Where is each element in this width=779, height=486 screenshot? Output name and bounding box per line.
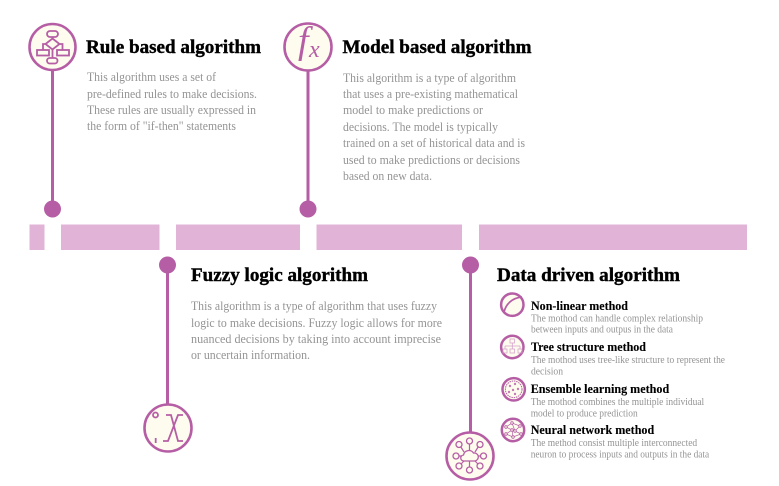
icon: fuzzy logic curve	[144, 404, 192, 452]
text: model based description: based on new data.	[343, 168, 432, 183]
method: neural network	[502, 419, 710, 460]
label: neural network: The method consist multiple interconnected	[531, 438, 697, 449]
panel: model based algorithm	[284, 20, 532, 218]
label: non-linear: between inputs and outpus in the data	[531, 324, 673, 336]
label: ensemble learning	[531, 381, 704, 420]
connector: fuzzy logic	[159, 256, 176, 405]
method: non-linear	[501, 294, 703, 336]
label: ensemble learning: model to produce prediction	[531, 408, 638, 420]
icon: function fx: f	[298, 20, 313, 62]
icon: ensemble	[502, 378, 525, 400]
label: tree structure: decision	[531, 366, 563, 378]
method: tree structure	[501, 336, 725, 378]
label: neural network: Neural network method	[531, 422, 655, 437]
icon: flowchart	[30, 24, 76, 70]
text: model based description	[343, 70, 525, 183]
label: non-linear: Non-linear method	[531, 298, 629, 313]
text: rule based description: These rules are usually expressed in	[87, 102, 256, 117]
text: model based description: decisions. The model is typically	[343, 119, 498, 134]
icon: curve	[501, 294, 524, 316]
timeline bar	[30, 224, 747, 250]
label: tree structure: Tree structure method	[531, 339, 647, 354]
method: ensemble learning	[502, 378, 704, 420]
label: ensemble learning: Ensemble learning method	[531, 381, 670, 396]
label: tree structure: The mothod uses tree-like structure to represent the	[531, 355, 725, 366]
label: ensemble learning: The mothod combines the multiple individual	[531, 397, 704, 408]
text: fuzzy logic description: nuanced decisions by taking into account imprecise	[191, 331, 441, 346]
panel: rule based algorithm	[30, 24, 262, 218]
text: rule based description: This algorithm uses a set of	[87, 69, 217, 84]
heading: data driven: Data driven algorithm	[497, 266, 681, 286]
heading: model based: Model based algorithm	[342, 38, 532, 58]
text: fuzzy logic description	[191, 298, 442, 362]
icon: tree	[501, 336, 524, 358]
text: model based description: model to make predictions or	[343, 102, 484, 117]
label: neural network	[531, 422, 710, 460]
text: model based description: used to make predictions or decisions	[343, 152, 520, 167]
panel: fuzzy logic algorithm	[144, 256, 442, 452]
label: tree structure	[531, 339, 725, 378]
label: neural network: neuron to process inputs and outputs in the data	[531, 450, 710, 460]
icon: neural network	[502, 419, 524, 441]
text: model based description: trained on a set of historical data and is	[343, 135, 525, 150]
label: non-linear	[531, 298, 703, 336]
text: fuzzy logic description: This algorithm is a type of algorithm that uses fuzzy	[191, 298, 437, 313]
panel: data driven algorithm	[446, 256, 725, 480]
text: rule based description: pre-defined rules to make decisions.	[87, 86, 257, 101]
text: rule based description	[87, 69, 257, 133]
connector: data driven	[462, 256, 479, 433]
label: non-linear: The mothod can handle complex relationship	[531, 314, 703, 324]
text: rule based description: the form of "if-then" statements	[87, 118, 236, 133]
text: fuzzy logic description: or uncertain information.	[191, 347, 310, 362]
icon: function fx: x	[308, 37, 320, 63]
text: fuzzy logic description: logic to make decisions. Fuzzy logic allows for more	[191, 315, 442, 330]
connector: model based	[300, 68, 316, 218]
heading: rule based: Rule based algorithm	[86, 38, 262, 58]
connector: rule based	[44, 68, 61, 218]
text: model based description: that uses a pre-existing mathematical	[343, 86, 518, 101]
heading: fuzzy logic: Fuzzy logic algorithm	[191, 266, 369, 286]
text: model based description: This algorithm is a type of algorithm	[343, 70, 516, 85]
icon: function fx	[284, 20, 332, 70]
icon: cloud network	[446, 432, 494, 480]
